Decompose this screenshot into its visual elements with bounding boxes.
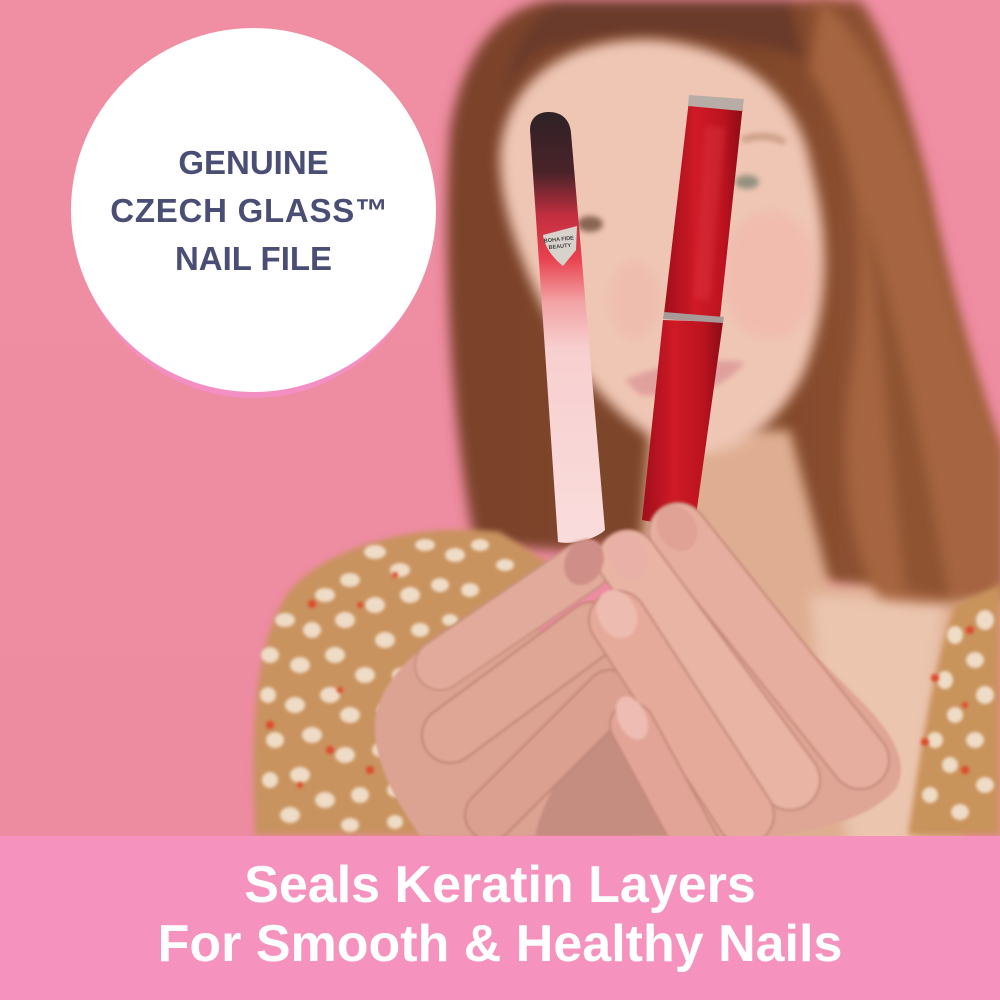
red case xyxy=(642,95,744,530)
headline banner: For Smooth & Healthy Nails xyxy=(158,915,842,973)
shadow between hands xyxy=(535,700,670,836)
nail file xyxy=(530,112,605,543)
file logo: BOHA FIDE xyxy=(544,235,574,245)
floral dress xyxy=(253,530,1000,835)
right hair lock xyxy=(810,0,1000,603)
badge text: NAIL FILE xyxy=(175,240,332,277)
chest highlight xyxy=(810,595,945,850)
badge text: CZECH GLASS™ xyxy=(110,192,389,229)
hands xyxy=(375,498,901,850)
hair back xyxy=(447,0,1000,602)
facial features xyxy=(577,136,785,396)
right hand fingers xyxy=(618,532,860,850)
badge text xyxy=(110,144,389,277)
badge shadow xyxy=(74,34,432,398)
left hand palm xyxy=(375,625,640,836)
badge circle xyxy=(71,28,436,392)
file logo: BEAUTY xyxy=(548,243,572,251)
neck and chest xyxy=(640,430,1000,850)
badge text: GENUINE xyxy=(178,144,329,181)
file logo xyxy=(543,226,577,266)
nails xyxy=(557,532,611,592)
headline banner: Seals Keratin Layers xyxy=(244,856,756,914)
face xyxy=(500,40,825,453)
headline banner xyxy=(0,836,1000,1000)
right hand back xyxy=(620,540,901,836)
left hand fingers xyxy=(440,566,610,815)
